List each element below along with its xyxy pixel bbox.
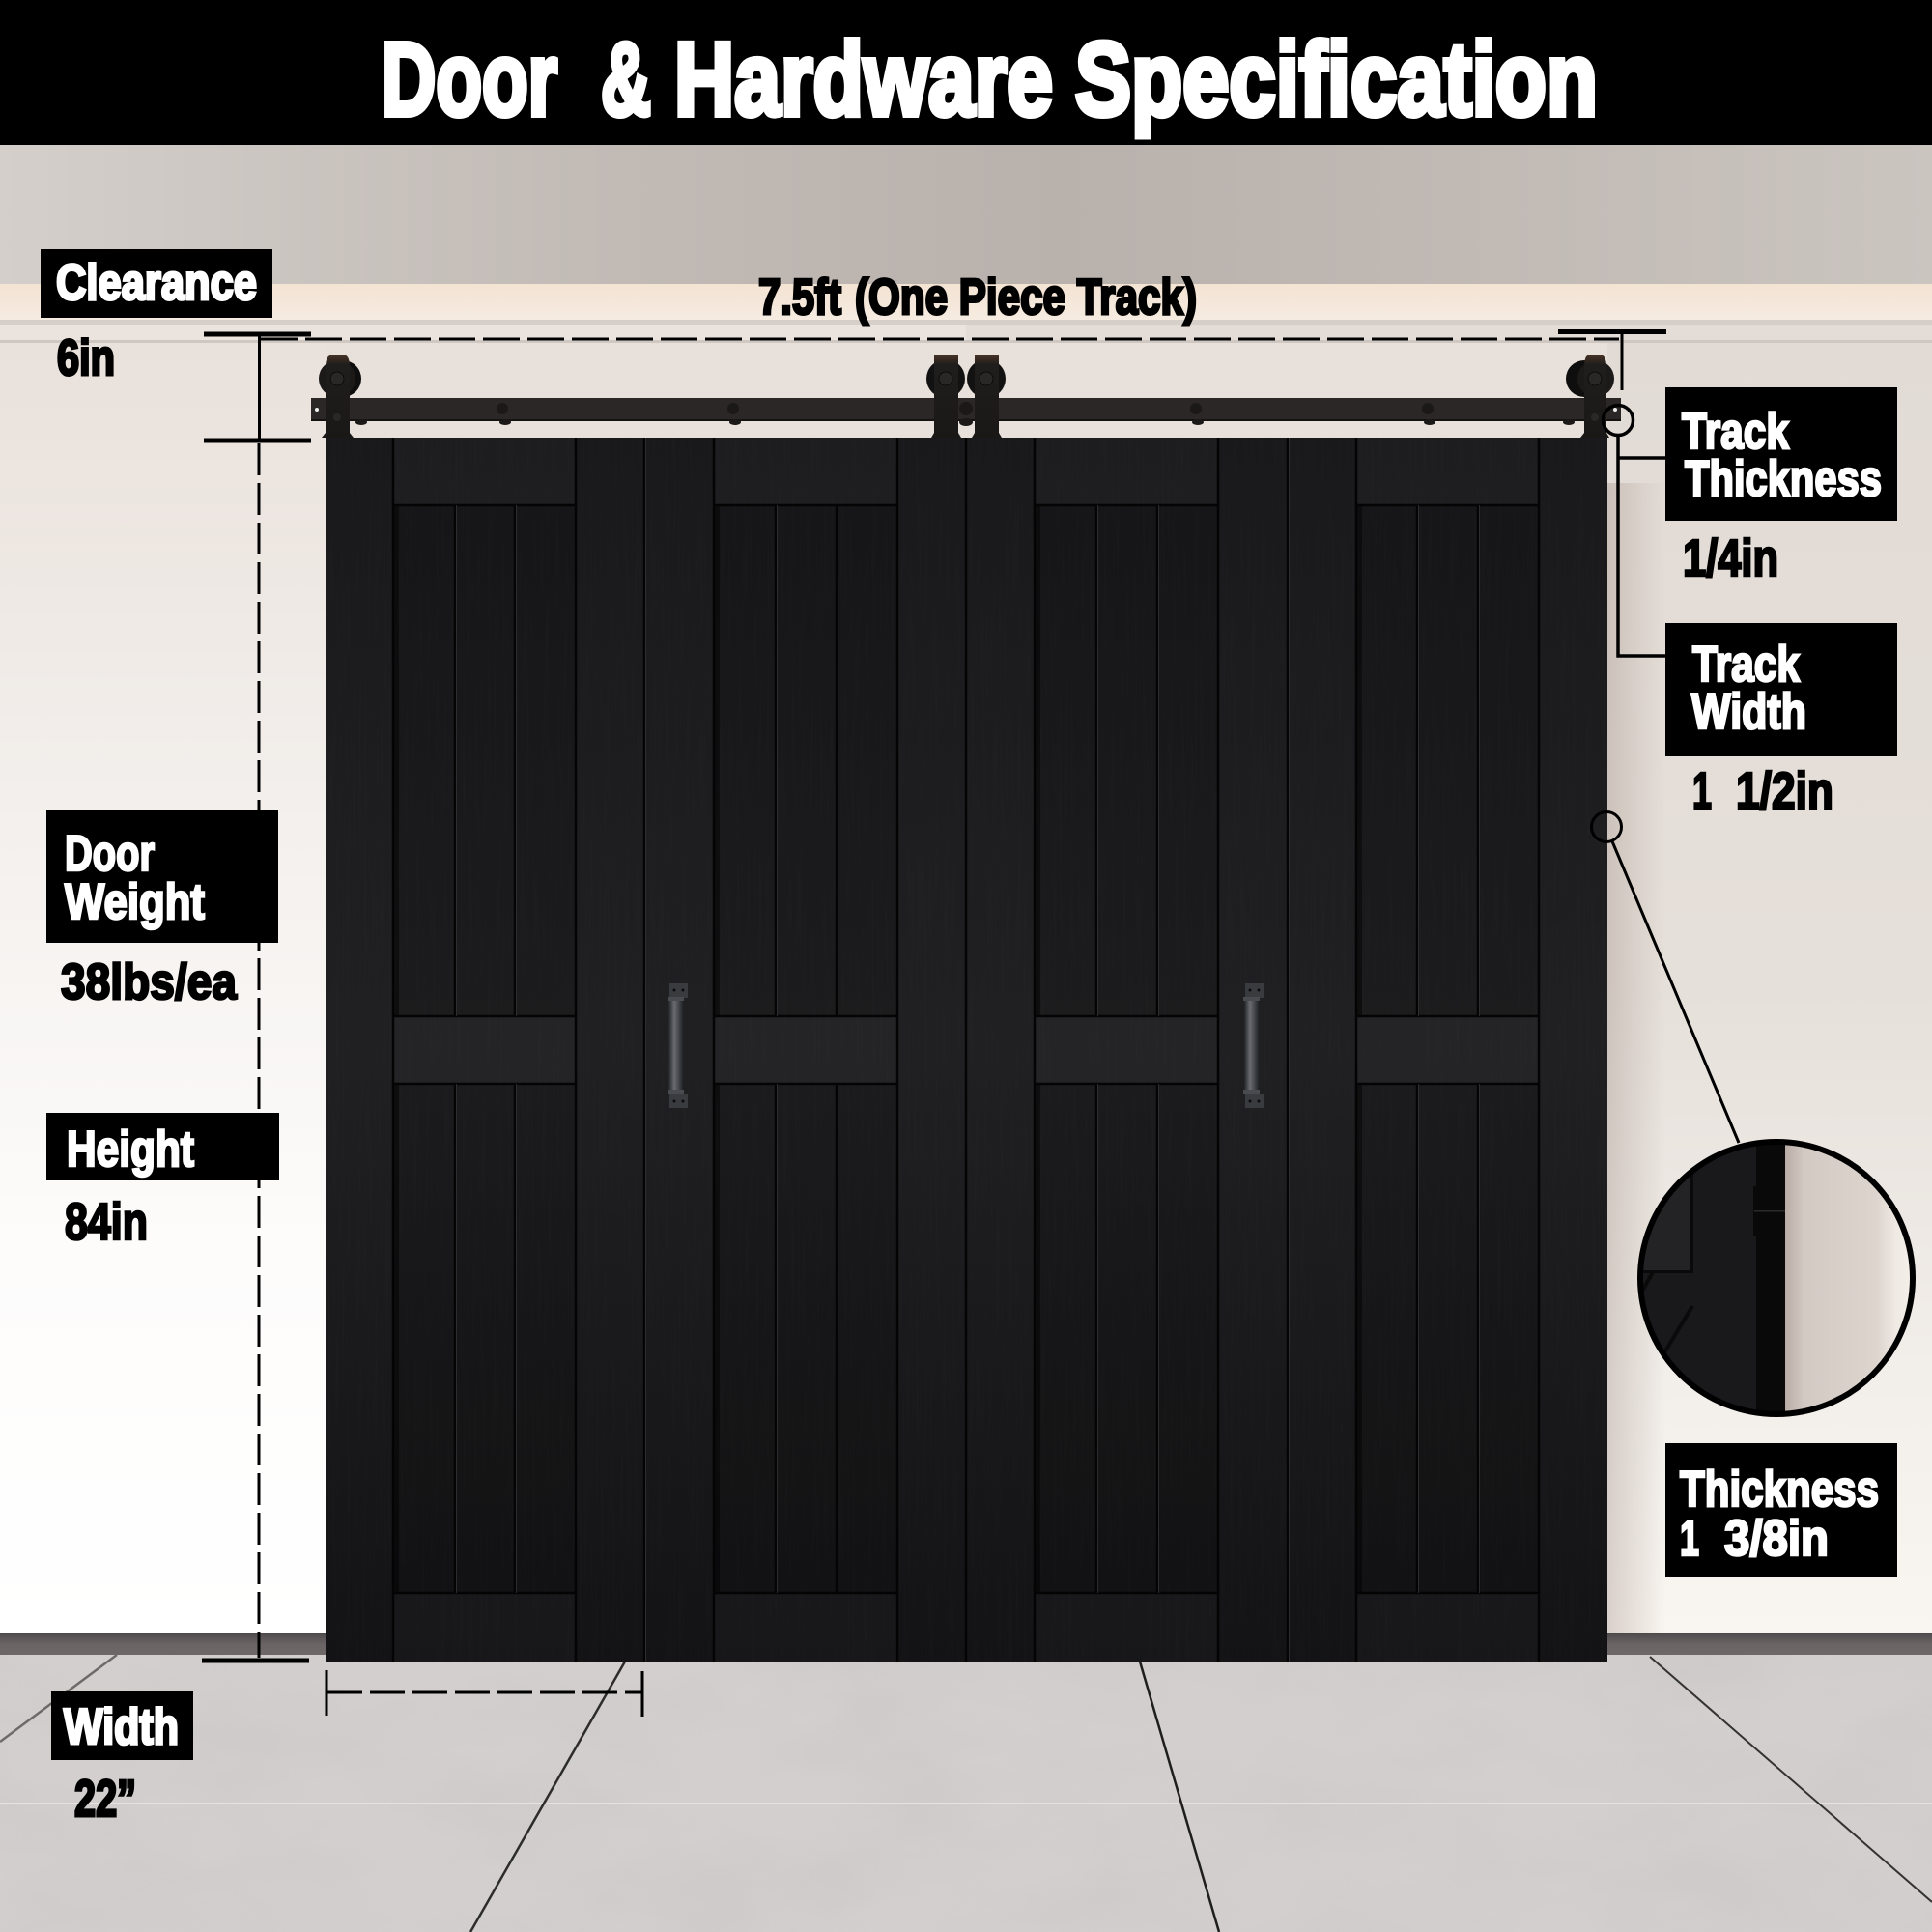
dimension: track top marker bbox=[1558, 329, 1666, 390]
label: track length: (One Piece Track) bbox=[855, 270, 1197, 326]
icon: hanger 1 bbox=[319, 355, 361, 438]
icon: hanger 3 bbox=[967, 355, 1006, 438]
label: track length bbox=[758, 270, 1197, 326]
connector: thickness callout bbox=[1592, 811, 1739, 1143]
detail circle: door edge thickness bbox=[1637, 1139, 1916, 1417]
label: track thickness bbox=[1665, 387, 1897, 521]
label: track width: Width bbox=[1691, 684, 1806, 740]
label: height: Height bbox=[67, 1122, 194, 1178]
label: width: Width bbox=[64, 1699, 179, 1755]
label: door thickness: 1 bbox=[1680, 1511, 1699, 1567]
icon: door handle left bbox=[668, 983, 688, 1108]
connector: track callouts bbox=[1604, 406, 1665, 656]
label: track width bbox=[1665, 623, 1897, 756]
dimension: clearance bbox=[204, 332, 311, 442]
label: clearance: Clearance bbox=[56, 255, 257, 311]
value: width: 22” bbox=[74, 1770, 136, 1828]
label: track width: Track bbox=[1692, 637, 1800, 693]
dimension: door width bbox=[325, 1670, 643, 1717]
icon: hanger 2 bbox=[926, 355, 965, 438]
recess shadows bbox=[393, 505, 1362, 1593]
label: track length: 7.5ft bbox=[758, 270, 841, 326]
label: track thickness: Thickness bbox=[1685, 451, 1882, 507]
panel: recessed plank fields bbox=[393, 505, 1539, 1593]
value: height: 84in bbox=[65, 1193, 148, 1251]
label: door weight: Door bbox=[65, 826, 155, 882]
rails bbox=[393, 438, 1539, 1662]
title banner bbox=[0, 0, 1932, 145]
barn door set bbox=[326, 438, 1607, 1662]
stile and plank grooves bbox=[393, 438, 1539, 1662]
label: door weight bbox=[46, 810, 278, 943]
icon: door handle right bbox=[1243, 983, 1264, 1108]
value: track width: 1/2in bbox=[1736, 762, 1833, 820]
value: door weight: 38lbs/ea bbox=[61, 954, 238, 1010]
value: track thickness: 1/4in bbox=[1683, 529, 1778, 587]
barn door track bbox=[311, 398, 1621, 426]
label: door thickness: Thickness bbox=[1680, 1462, 1879, 1518]
label: track thickness: Track bbox=[1682, 404, 1789, 460]
value: track width: 1 bbox=[1692, 762, 1712, 820]
title banner: Specification bbox=[1075, 20, 1598, 137]
value: clearance 6in: 6in bbox=[57, 330, 115, 386]
title banner: Hardware bbox=[674, 20, 1053, 137]
label: door thickness: 3/8in bbox=[1724, 1511, 1829, 1567]
dimension: track length dashes bbox=[261, 338, 1619, 340]
label: height bbox=[46, 1113, 279, 1180]
title banner: Door bbox=[382, 20, 557, 137]
value: track width bbox=[1692, 762, 1833, 820]
label: door thickness bbox=[1665, 1443, 1897, 1577]
dimension: door height bbox=[202, 443, 309, 1663]
title banner: & bbox=[601, 20, 651, 137]
label: door weight: Weight bbox=[65, 874, 205, 930]
icon: hanger 4 bbox=[1566, 355, 1614, 438]
